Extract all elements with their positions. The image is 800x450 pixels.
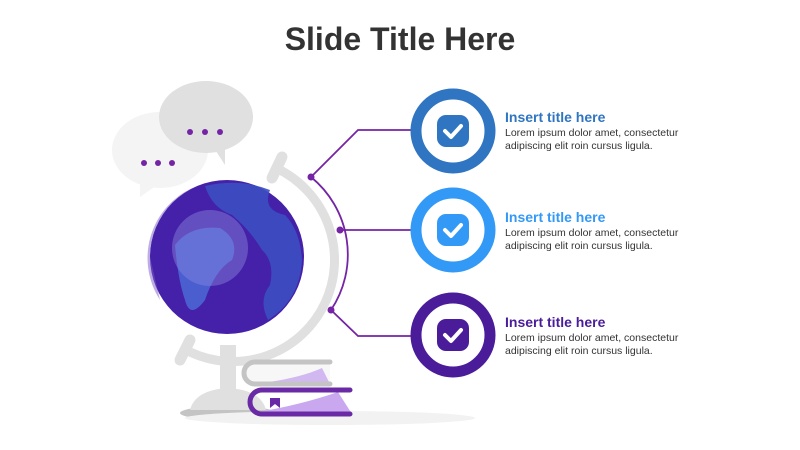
text block 3: adipiscing elit roin cursus ligula. bbox=[505, 345, 653, 357]
icon: check circle 1 bbox=[416, 94, 490, 168]
text block 1: adipiscing elit roin cursus ligula. bbox=[505, 140, 653, 152]
title: Slide Title Here bbox=[285, 21, 515, 57]
text block 1: Insert title here bbox=[505, 109, 605, 125]
books bbox=[185, 362, 475, 425]
icon: front speech bubble bbox=[159, 81, 253, 165]
text block 2: Insert title here bbox=[505, 209, 605, 225]
text block 2: Lorem ipsum dolor amet, consectetur bbox=[505, 227, 678, 239]
icon: back speech bubble bbox=[112, 112, 208, 197]
icon: check circle 3 bbox=[416, 298, 490, 372]
text block 2 bbox=[505, 209, 678, 252]
icon: check circle 2 bbox=[416, 193, 490, 267]
connector lines bbox=[308, 130, 412, 336]
text block 2: adipiscing elit roin cursus ligula. bbox=[505, 240, 653, 252]
globe bbox=[148, 180, 304, 334]
text block 1 bbox=[505, 109, 678, 152]
globe stand bbox=[180, 157, 335, 420]
text block 3: Insert title here bbox=[505, 314, 605, 330]
text block 3: Lorem ipsum dolor amet, consectetur bbox=[505, 332, 678, 344]
text block 3 bbox=[505, 314, 678, 357]
text block 1: Lorem ipsum dolor amet, consectetur bbox=[505, 127, 678, 139]
